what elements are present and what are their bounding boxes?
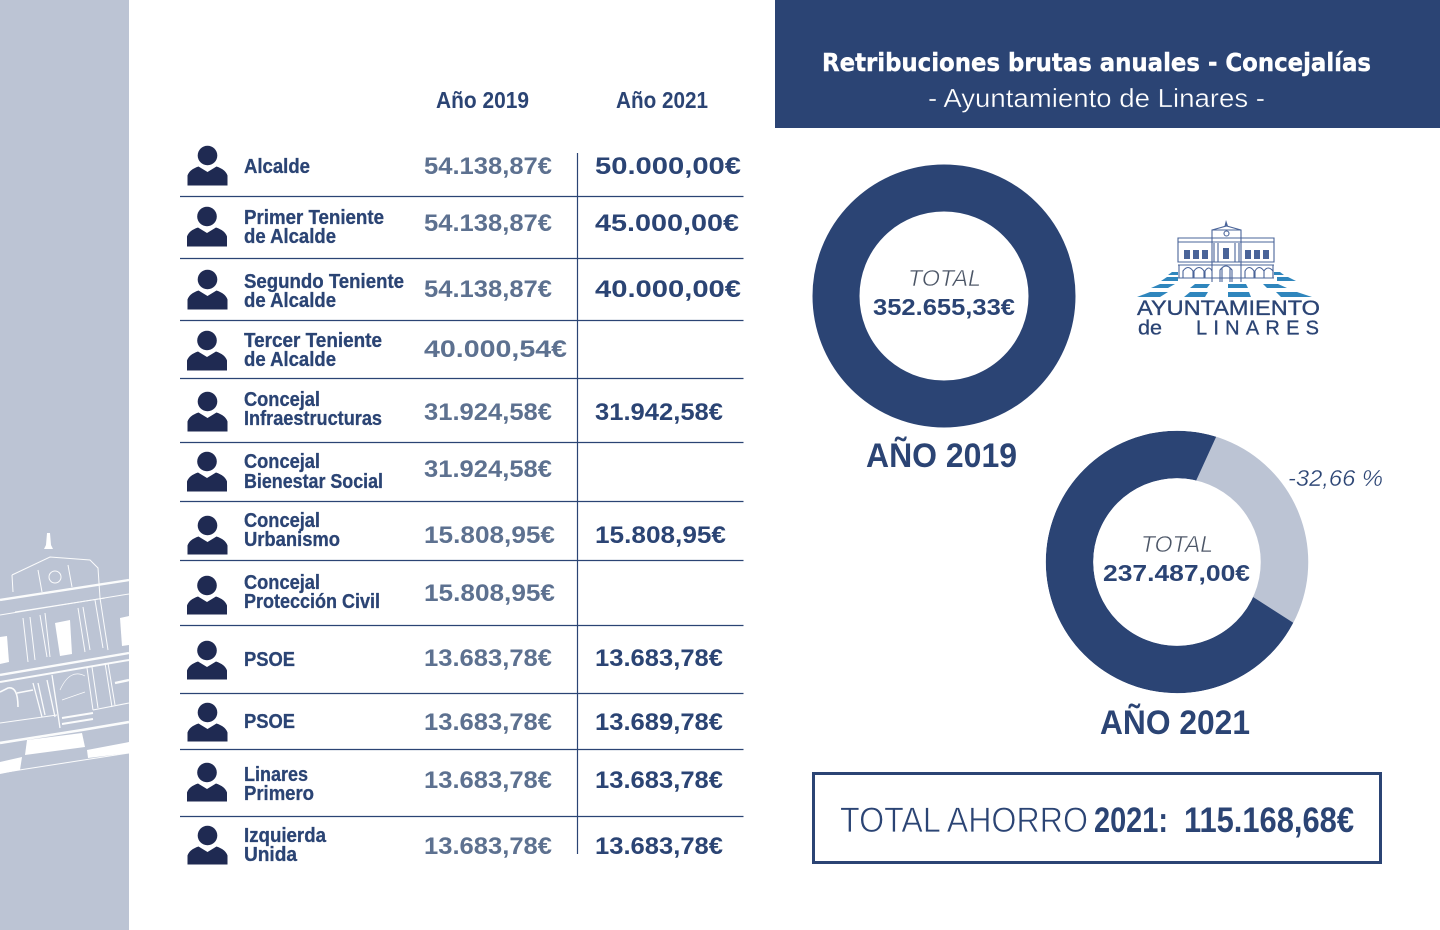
donut inner mask — [1093, 478, 1261, 646]
panel: left sidebar with building outline — [0, 0, 129, 930]
label: Concejal — [244, 572, 320, 594]
icon: person — [188, 146, 228, 186]
label: total: TOTAL — [1141, 531, 1213, 557]
segment: savings share — [1196, 436, 1309, 623]
label: Concejal — [244, 451, 320, 473]
value 2019: 40.000,54€ — [424, 336, 567, 363]
value 2021: 50.000,00€ — [595, 153, 741, 180]
label: Segundo Teniente — [244, 271, 404, 293]
label: PSOE — [244, 711, 295, 733]
row: Izquierda Unida — [188, 825, 723, 866]
callout: percent change: -32,66 % — [1288, 465, 1383, 491]
text: year: 2021: — [1094, 801, 1168, 840]
label line 2: Bienestar Social — [244, 471, 383, 493]
value 2019: 54.138,87€ — [424, 210, 552, 237]
value 2021: 31.942,58€ — [595, 399, 723, 426]
label line 2: de Alcalde — [244, 349, 336, 371]
heading: subtitle: - Ayuntamiento de Linares - — [928, 83, 1265, 113]
icon: person — [187, 207, 227, 246]
row: Tercer Teniente de Alcalde — [187, 330, 567, 371]
label: Izquierda — [244, 825, 327, 847]
label line 2: Protección Civil — [244, 591, 380, 613]
label line 2: Unida — [244, 844, 298, 866]
icon: person — [188, 270, 228, 310]
label: total: TOTAL — [908, 265, 981, 291]
value 2021: 13.683,78€ — [595, 767, 723, 794]
donut chart 2021 — [1045, 430, 1309, 694]
value 2021: 40.000,00€ — [595, 276, 741, 303]
row: Concejal Infraestructuras — [188, 389, 723, 432]
row: Alcalde — [188, 146, 741, 186]
label: Linares — [244, 764, 308, 786]
label line 2: de Alcalde — [244, 290, 336, 312]
value 2021: 13.689,78€ — [595, 709, 723, 736]
row: PSOE — [187, 641, 723, 680]
donut chart 2019 — [836, 188, 1052, 404]
value 2021: 15.808,95€ — [595, 522, 726, 549]
icon: person — [188, 703, 228, 742]
logo text line 2: de — [1138, 318, 1162, 340]
heading: Año 2019: AÑO 2019 — [866, 437, 1017, 475]
sidebar windows and floor tiles — [0, 616, 129, 774]
panel: total savings box — [814, 774, 1380, 862]
value 2019: 13.683,78€ — [424, 645, 552, 672]
value 2019: 13.683,78€ — [424, 767, 552, 794]
row: Concejal Bienestar Social — [187, 451, 552, 493]
row: PSOE second — [188, 703, 723, 742]
value 2021: 13.683,78€ — [595, 833, 723, 860]
icon: person — [187, 576, 227, 614]
label line 2: de Alcalde — [244, 226, 336, 248]
value 2019: 54.138,87€ — [424, 153, 552, 180]
value 2019: 13.683,78€ — [424, 833, 552, 860]
value 2019: 31.924,58€ — [424, 399, 552, 426]
value 2019: 54.138,87€ — [424, 276, 552, 303]
logo text line 3: LINARES — [1196, 318, 1319, 340]
value 2019: 31.924,58€ — [424, 456, 552, 483]
icon: person — [187, 452, 227, 492]
label: Concejal — [244, 510, 320, 532]
text: savings amount: 115.168,68€ — [1184, 801, 1354, 840]
icon: person — [188, 392, 228, 432]
label line 2: Urbanismo — [244, 529, 340, 551]
row: Linares Primero — [187, 763, 723, 805]
text: total ahorro label: TOTAL AHORRO — [840, 801, 1088, 840]
value 2021: 45.000,00€ — [595, 210, 739, 237]
value 2019: 13.683,78€ — [424, 709, 552, 736]
label: Concejal — [244, 389, 320, 411]
value 2019: 15.808,95€ — [424, 580, 555, 607]
icon: person — [187, 763, 227, 802]
row: Segundo Teniente de Alcalde — [188, 270, 741, 312]
table column heading 2019: Año 2019 — [436, 87, 529, 113]
row: Concejal Protección Civil — [187, 572, 555, 614]
logo text: AYUNTAMIENTO — [1137, 297, 1320, 320]
heading: title: Retribuciones brutas anuales - Concejalías — [822, 48, 1371, 77]
label: PSOE — [244, 649, 295, 671]
sidebar spire — [44, 533, 53, 549]
icon: person — [187, 641, 227, 680]
heading: Año 2021: AÑO 2021 — [1100, 704, 1250, 742]
value 2021: 13.683,78€ — [595, 645, 723, 672]
label: Primer Teniente — [244, 207, 384, 229]
icon: person — [188, 516, 228, 554]
label: Tercer Teniente — [244, 330, 382, 352]
panel: header banner — [775, 0, 1440, 128]
label: Alcalde — [244, 156, 310, 178]
table column heading 2021: Año 2021 — [616, 87, 708, 113]
row: Primer Teniente de Alcalde — [187, 207, 739, 248]
label line 2: Primero — [244, 783, 314, 805]
icon: person — [188, 826, 228, 864]
row: Concejal Urbanismo — [188, 510, 726, 554]
icon: person — [187, 331, 227, 370]
label line 2: Infraestructuras — [244, 408, 382, 430]
panel: salary table — [180, 146, 744, 866]
value: total 2019: 352.655,33€ — [873, 294, 1015, 320]
icon: Ayuntamiento de Linares logo — [1137, 220, 1320, 340]
value 2019: 15.808,95€ — [424, 522, 555, 549]
donut outer mask — [1045, 430, 1309, 694]
value: total 2021: 237.487,00€ — [1103, 560, 1250, 586]
